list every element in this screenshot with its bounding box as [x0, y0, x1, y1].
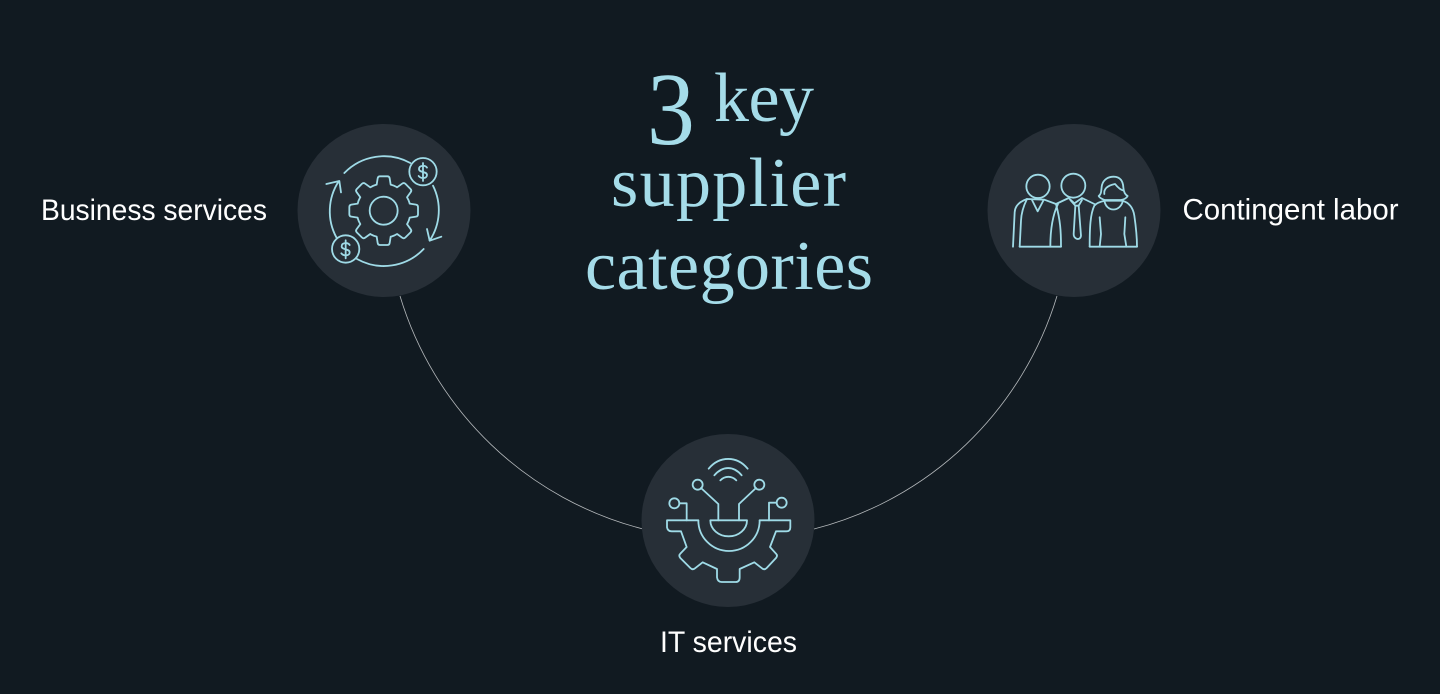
title: supplier: [611, 145, 846, 222]
icon: gear with circular arrows and dollar coins: [326, 156, 441, 266]
icon circle: contingent labor: [988, 124, 1160, 297]
label: contingent labor: Contingent labor: [1182, 194, 1399, 226]
connector arc: right: [814, 296, 1057, 529]
connector arc: left: [400, 296, 643, 529]
title: categories: [585, 228, 873, 305]
label: IT services: IT services: [660, 626, 797, 659]
icon circle: business services: [298, 124, 470, 297]
title: key: [714, 60, 814, 137]
panel: IT services: [642, 434, 814, 659]
title: 3: [647, 51, 695, 167]
panel: business services: [41, 124, 470, 297]
label: business services: Business services: [41, 194, 267, 227]
panel: contingent labor: [988, 124, 1399, 297]
icon circle: IT services: [642, 434, 814, 607]
icon: gear with light bulb and wifi: [667, 459, 790, 582]
title: [585, 51, 873, 305]
icon: three people: [1013, 174, 1137, 247]
